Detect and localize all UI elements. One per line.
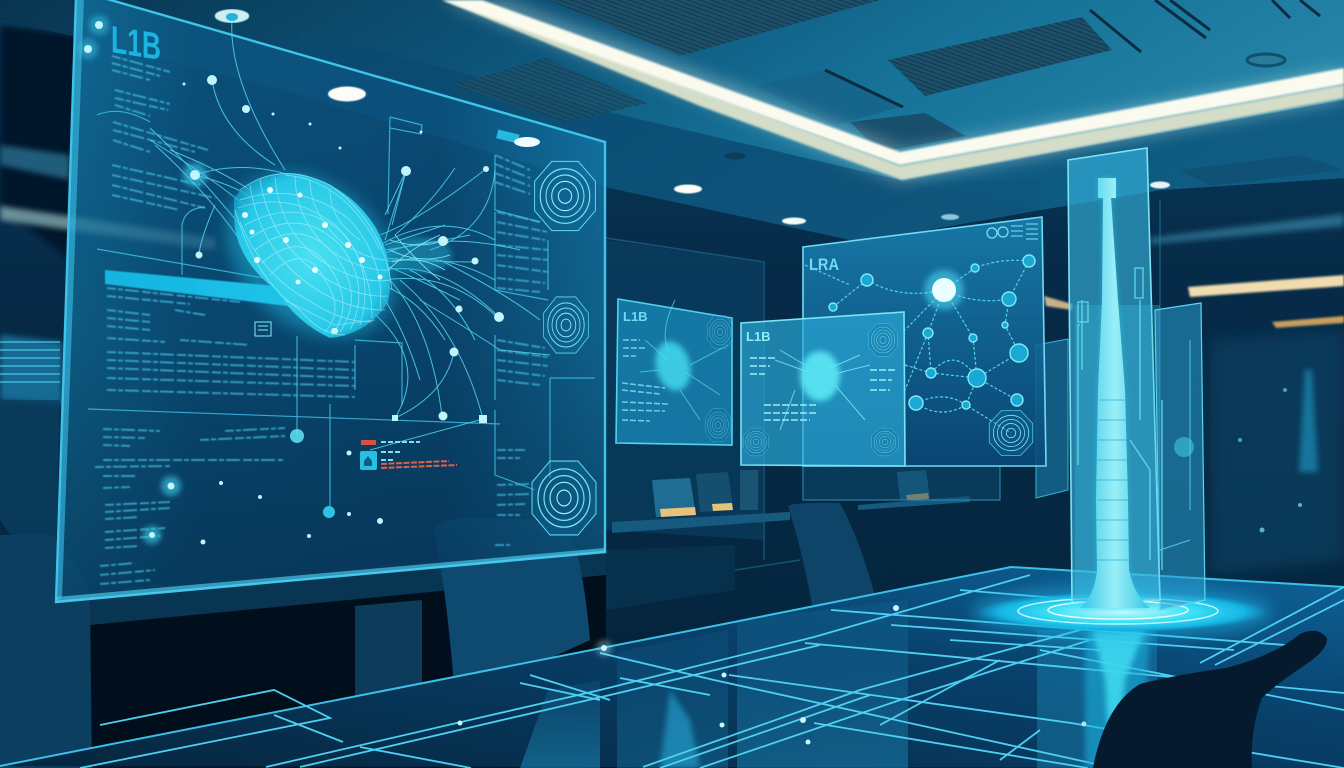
chair: back: [788, 503, 875, 622]
hologram tower panel: [1068, 148, 1160, 602]
glowing label chip: [496, 129, 540, 147]
hologram tower column: [1078, 178, 1194, 608]
map legend: [987, 224, 1038, 239]
dashboard glow nodes: [78, 15, 504, 544]
ceiling spot lights: [674, 54, 1285, 224]
brain wire mesh: [235, 174, 392, 335]
front display text bars: [750, 358, 895, 420]
panel: main holographic dashboard: [55, 0, 605, 602]
ceiling light strips: [440, 0, 1344, 182]
panel: network map: [803, 217, 1046, 466]
map hub node: [924, 270, 964, 310]
map links: [805, 260, 1029, 460]
front display heading: L1B: [746, 329, 771, 344]
front display brain: [775, 350, 870, 430]
panel behind: far right glass: [1036, 339, 1068, 498]
small display dials: [705, 316, 733, 442]
dashboard neural curves: [150, 20, 550, 450]
table glow points: [458, 605, 1086, 744]
table edge glow: [0, 567, 1344, 766]
brain nodes: [242, 187, 382, 334]
small display brain: [640, 300, 728, 420]
hologram disc: [972, 586, 1272, 638]
back glass wall and desk: [606, 200, 1160, 610]
dashboard frame lines: [88, 111, 595, 512]
ceiling vents: [452, 0, 1344, 186]
table circuit grid: [80, 575, 1344, 768]
table top: [0, 567, 1344, 768]
dashboard alert block: [360, 440, 457, 470]
dashboard highlight bar: [105, 270, 362, 315]
reflected spot light: [328, 86, 366, 102]
panel: small far-left display: [616, 299, 733, 445]
dashboard brain: [195, 139, 429, 371]
dashboard dial: middle: [544, 297, 588, 353]
ceiling: [0, 0, 1344, 242]
table light beams: [520, 600, 1157, 768]
panel: front translucent display: [741, 312, 905, 466]
dashboard title: L1B: [111, 18, 161, 69]
icon: ceiling projector: [215, 10, 249, 22]
dashboard sub-tile: [255, 322, 271, 336]
chair: centre: [434, 518, 590, 700]
tower reflection: [1085, 630, 1150, 768]
panel heading: map: LRA: [809, 255, 839, 274]
hologram tower panel back: [1155, 303, 1205, 610]
panel: lower glass under map: [803, 466, 1000, 500]
distant hologram on right wall: [1238, 370, 1318, 532]
small display text bars: [622, 340, 668, 421]
map nodes: [829, 255, 1035, 410]
dashboard dial: top: [535, 161, 595, 231]
floor dark area: [90, 545, 606, 768]
chair: left: [0, 535, 92, 768]
left wall shadow: [0, 25, 80, 260]
wall light bands: [0, 145, 1344, 600]
dashboard text blocks: [95, 56, 548, 584]
map large dial: [989, 411, 1033, 455]
front display dials: [743, 324, 898, 456]
small display heading: L1B: [623, 309, 648, 324]
chair: foreground: [1093, 631, 1327, 768]
dashboard secondary hub: [384, 235, 452, 280]
background desk screens: [652, 470, 930, 517]
dashboard dial: bottom: [532, 461, 596, 535]
